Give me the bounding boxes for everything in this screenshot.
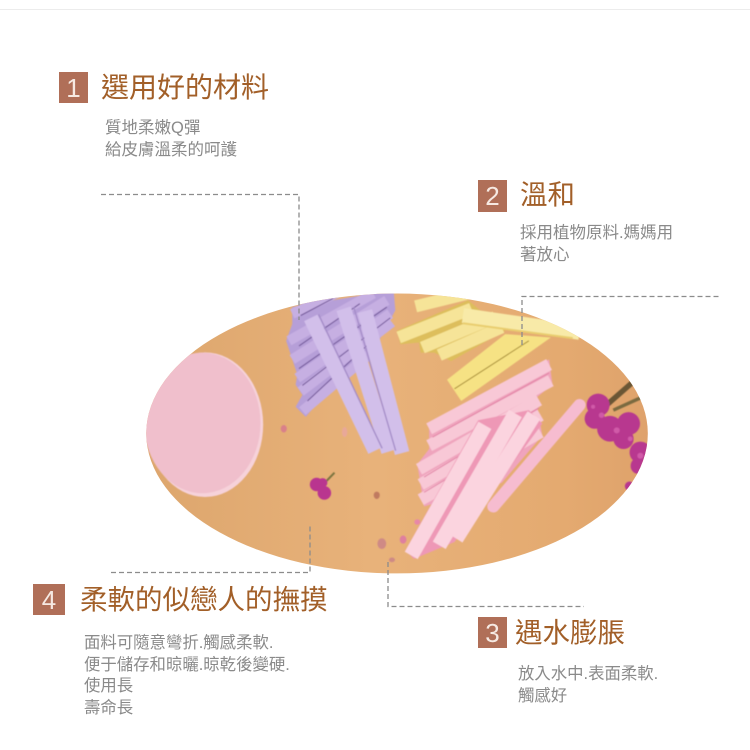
badge 3: 3: [485, 618, 500, 648]
heading 1: 選用好的材料: [101, 72, 269, 103]
lavender sponge stack: [286, 287, 402, 453]
dried flowers: [281, 381, 651, 562]
heading 2: 溫和: [520, 179, 575, 210]
text block 3: 放入水中.表面柔軟.: [518, 665, 658, 683]
text block 1: 質地柔嫩Q彈: [105, 119, 200, 137]
badge 3: [478, 617, 507, 648]
dashed connector 3: [388, 562, 584, 606]
text block 1: [105, 118, 237, 158]
text block 2: 著放心: [520, 246, 570, 264]
text block 4: 使用長: [84, 677, 133, 695]
text block 2: 採用植物原料.媽媽用: [520, 224, 673, 242]
text block 4: 便于儲存和晾曬.晾乾後變硬.: [84, 656, 290, 674]
text block 1: 給皮膚溫柔的呵護: [105, 140, 237, 158]
badge 1: 1: [66, 73, 81, 103]
heading 4: 柔軟的似戀人的撫摸: [80, 584, 328, 615]
badge 1: [59, 72, 88, 103]
dashed connector 1: [101, 194, 299, 320]
text block 3: 觸感好: [518, 686, 567, 704]
product photo: [146, 294, 648, 574]
text block 2: [520, 224, 673, 264]
badge 4: 4: [42, 585, 56, 615]
text block 4: [84, 634, 290, 716]
text block 3: [518, 664, 658, 704]
heading 3: 遇水膨脹: [515, 617, 625, 648]
badge 4: [33, 584, 65, 615]
round pink sponge: [144, 352, 263, 497]
text block 4: 面料可隨意彎折.觸感柔軟.: [84, 634, 273, 652]
pink sponge stack: [405, 359, 580, 559]
dashed connector 4: [111, 525, 310, 572]
yellow sponge stack: [397, 294, 580, 401]
badge 2: [478, 180, 507, 212]
text block 4: 壽命長: [84, 698, 133, 716]
dashed connector 2: [522, 296, 720, 345]
badge 2: 2: [485, 181, 500, 211]
